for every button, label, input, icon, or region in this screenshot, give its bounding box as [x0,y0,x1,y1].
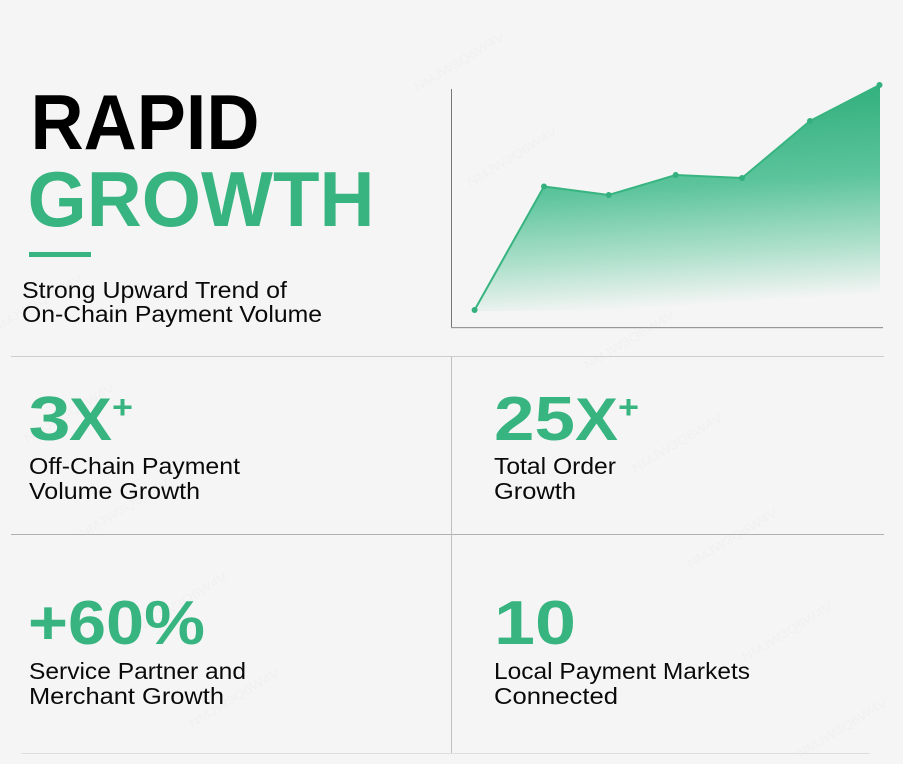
stat: 3X+: X [69,386,112,453]
stat: 25X+: + [618,389,639,425]
stat: 10: Connected [494,683,618,709]
text: NMJW3Q6W4V [629,411,725,476]
stat: 10 [494,589,750,709]
text: NMJW3Q6W4V [186,666,282,731]
subtitle: Strong Upward Trend of [22,277,287,303]
text: NMJW3Q6W4V [794,696,890,761]
stat: +60%: Service Partner and [29,658,246,684]
text: NMJW3Q6W4V [581,308,677,373]
stat: 10: 10 [494,589,576,658]
subtitle [22,277,322,327]
stat: 25X+: 25 [494,385,575,454]
stat: 10: Local Payment Markets [494,658,750,684]
stat: +60%: Merchant Growth [29,683,224,709]
text: NMJW3Q6W4V [21,381,117,446]
text: NMJW3Q6W4V [411,30,507,95]
stat: 25X+: X [575,386,618,453]
text: NMJW3Q6W4V [684,506,780,571]
text: NMJW3Q6W4V [519,221,615,286]
text: NMJW3Q6W4V [134,570,230,635]
text: NMJW3Q6W4V [739,600,835,665]
title [28,78,374,243]
stat: 3X+ [28,385,240,504]
stat: 3X+: + [112,389,133,425]
title: GROWTH [28,155,374,243]
stat: 3X+: Off-Chain Payment [29,453,240,479]
title: RAPID [30,78,260,166]
area chart [451,82,883,328]
text: NMJW3Q6W4V [464,125,560,190]
stat: 25X+: Total Order [494,453,616,479]
stat: 3X+: 3 [28,385,70,454]
subtitle: On-Chain Payment Volume [22,301,322,327]
stat: 25X+: Growth [494,478,576,504]
stat: 3X+: Volume Growth [29,478,200,504]
stat: +60%: +60% [28,589,205,658]
text: NMJW3Q6W4V [76,476,172,541]
stat: +60% [28,589,246,709]
title accent bar [29,252,91,257]
stat: 25X+ [494,385,639,504]
